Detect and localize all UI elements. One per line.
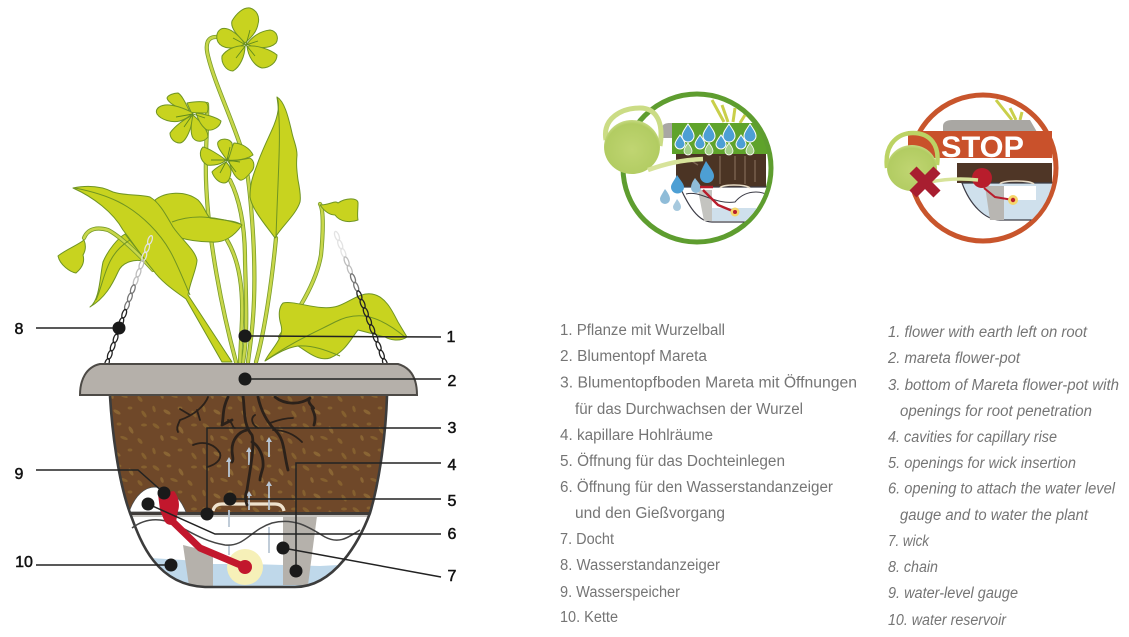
German legend: 2. Blumentopf Mareta [560, 348, 707, 365]
soil [105, 396, 395, 512]
gauge [972, 168, 1018, 205]
callout 8: 8 [15, 321, 24, 338]
watering can [887, 133, 978, 191]
water level wave [132, 520, 360, 545]
root opening [213, 504, 284, 511]
roots [177, 396, 315, 505]
capillary arrows [226, 437, 272, 555]
English legend: gauge and to water the plant [900, 507, 1089, 524]
leaf lower right [265, 294, 407, 361]
callout 7: 7 [448, 568, 457, 585]
German legend: 3. Blumentopfboden Mareta mit Öffnungen [560, 374, 857, 392]
leaf big left [73, 186, 232, 362]
STOP: STOP [941, 131, 1024, 164]
callout 2: 2 [448, 373, 457, 390]
water [153, 558, 338, 586]
callout 6 [142, 498, 457, 543]
leaf center tall [250, 97, 300, 238]
drops on panel [675, 124, 756, 149]
watering can [604, 108, 703, 174]
callout 3: 3 [448, 420, 457, 437]
callouts [15, 321, 457, 585]
plant [58, 8, 407, 362]
callout 4 [290, 457, 457, 578]
callout 5 [224, 492, 457, 510]
German legend: 4. kapillare Hohlräume [560, 427, 713, 444]
English legend: 8. chain [888, 559, 938, 576]
leaf lower left [90, 234, 147, 307]
callout 3 [200, 420, 457, 520]
plate [131, 512, 369, 515]
red cross [913, 170, 937, 194]
pot outline [110, 396, 387, 587]
German legend: 9. Wasserspeicher [560, 584, 680, 601]
arch opening [129, 487, 186, 512]
chain right [333, 231, 389, 368]
callout 9: 9 [15, 466, 24, 483]
bud right [320, 199, 358, 222]
callout 5: 5 [448, 493, 457, 510]
callout 6: 6 [448, 526, 457, 543]
German legend: 8. Wasserstandanzeiger [560, 557, 720, 574]
callout 1: 1 [447, 329, 456, 346]
English legend: 7. wick [888, 533, 930, 550]
banner [908, 131, 1052, 158]
callout 8 [15, 321, 126, 338]
English legend [887, 324, 1119, 629]
leaf veins [75, 97, 405, 361]
flower center [200, 139, 254, 183]
German legend [560, 322, 857, 626]
falling drops [660, 161, 714, 211]
English legend: 3. bottom of Mareta flower-pot with [888, 377, 1119, 394]
German legend: 7. Docht [560, 531, 615, 548]
callout 2 [238, 372, 457, 390]
bud left [58, 240, 85, 273]
German legend: 6. Öffnung für den Wasserstandanzeiger [560, 478, 833, 496]
pot interior [105, 396, 395, 591]
flower top [217, 8, 277, 71]
English legend: openings for root penetration [900, 403, 1092, 420]
German legend: und den Gießvorgang [575, 505, 725, 522]
callout 4: 4 [448, 457, 457, 474]
English legend: 4. cavities for capillary rise [888, 429, 1057, 446]
English legend: 6. opening to attach the water level [888, 480, 1116, 498]
pot rim [943, 120, 1037, 132]
callout 9 [15, 466, 170, 500]
callout 1 [238, 329, 456, 346]
callout 10 [15, 554, 178, 572]
column right [283, 516, 317, 585]
English legend: 10. water reservoir [888, 612, 1007, 629]
column left [183, 545, 213, 586]
chain left [104, 235, 153, 368]
lower pot [962, 183, 1055, 220]
icon: stop overwatering [887, 95, 1056, 241]
pot rim [80, 364, 417, 395]
English legend: 2. mareta flower-pot [887, 350, 1021, 367]
leaf upper back [155, 193, 242, 242]
English legend: 9. water-level gauge [888, 585, 1018, 602]
German legend: 10. Kette [560, 609, 618, 626]
lower pot [680, 187, 770, 222]
soil streaks [690, 156, 755, 184]
flower pot [80, 364, 417, 591]
icon: correct watering [604, 94, 771, 242]
pot rim [662, 123, 672, 138]
center cavity [213, 563, 228, 564]
bud stem left [84, 229, 153, 270]
water level gauge [158, 491, 263, 585]
soil [957, 163, 1052, 183]
green panel [672, 123, 767, 154]
English legend: 1. flower with earth left on root [888, 324, 1088, 341]
English legend: 5. openings for wick insertion [888, 455, 1076, 472]
small plant [712, 100, 745, 123]
small plant [996, 100, 1022, 120]
plant stems [206, 37, 323, 362]
flower left [156, 93, 221, 143]
gauge [700, 187, 735, 212]
German legend: für das Durchwachsen der Wurzel [575, 401, 803, 418]
callout 10: 10 [15, 554, 33, 571]
German legend: 5. Öffnung für das Dochteinlegen [560, 452, 785, 470]
callout 7 [276, 542, 457, 585]
soil [676, 154, 766, 187]
German legend: 1. Pflanze mit Wurzelball [560, 322, 725, 339]
